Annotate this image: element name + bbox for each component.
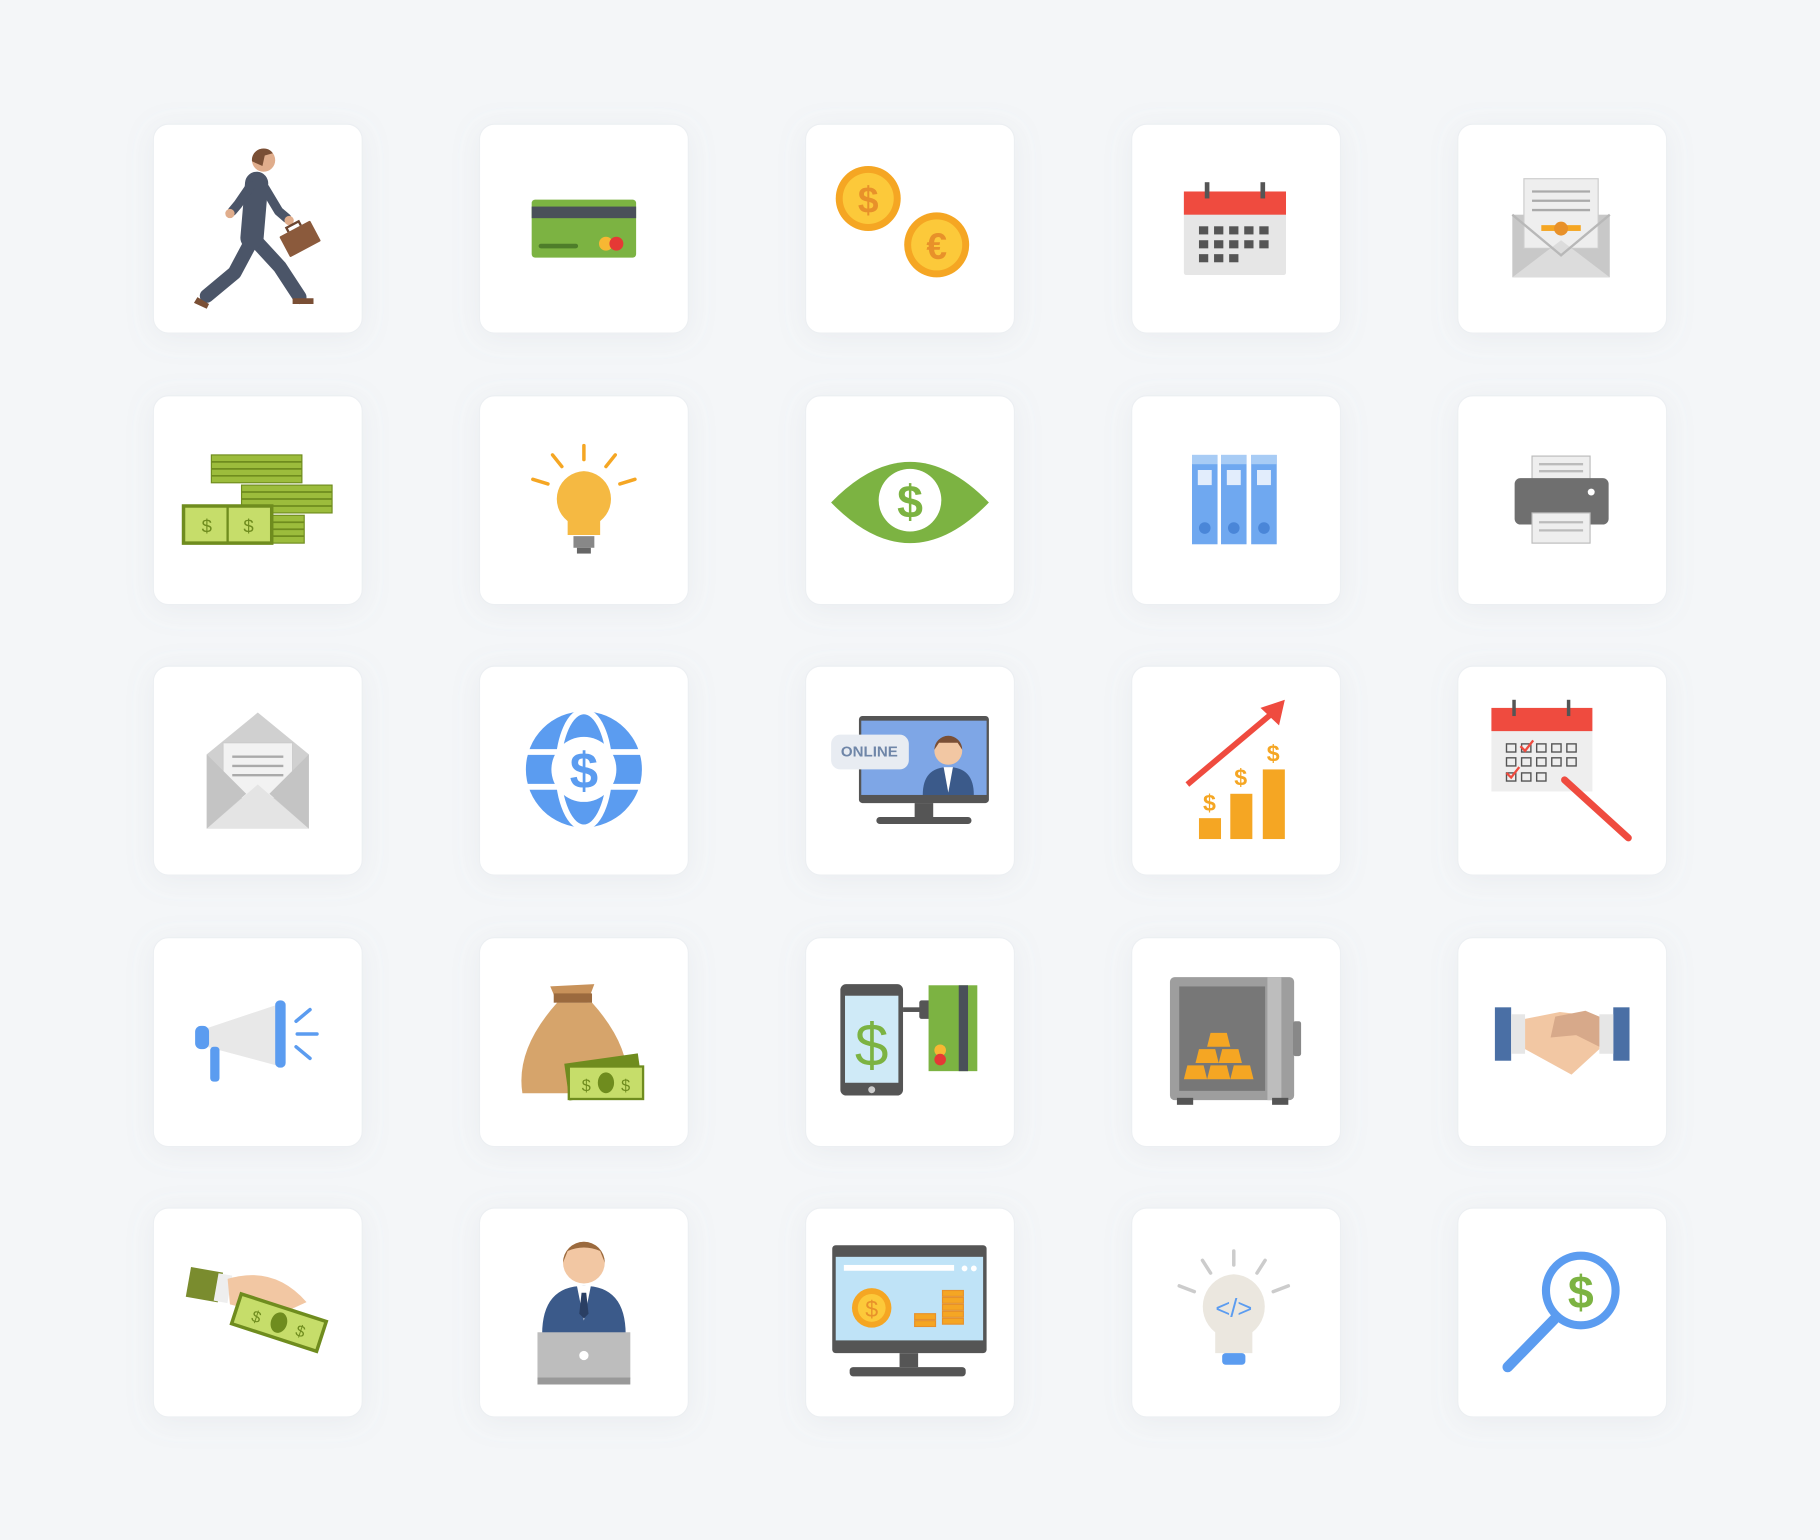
icon: phone payment — [840, 984, 977, 1096]
icon: growth chart — [1187, 700, 1285, 839]
icon: money bag: $ — [582, 1077, 591, 1095]
icon: online monitor: ONLINE — [841, 744, 898, 761]
icon: calendar — [1184, 182, 1286, 275]
icon: calendar magnifier — [1491, 700, 1628, 838]
icon: monitor with coins: $ — [865, 1296, 878, 1322]
icon: magnifier dollar — [1508, 1256, 1616, 1367]
icon: growth chart: $ — [1234, 765, 1247, 791]
icon: hand with money: $ — [249, 1307, 263, 1327]
icon: magnifier dollar: $ — [1568, 1266, 1594, 1318]
icon: light bulb — [533, 446, 635, 554]
icon: credit card — [532, 200, 636, 258]
icon: hand with money — [186, 1267, 328, 1353]
icon: globe dollar — [526, 711, 642, 827]
icon: eye with dollar: $ — [897, 476, 923, 528]
card grid — [153, 124, 1667, 1417]
icon: money stacks — [184, 455, 332, 543]
icon: money stacks: $ — [202, 516, 213, 537]
icon: growth chart: $ — [1203, 790, 1216, 816]
icon: code bulb: </> — [1215, 1295, 1252, 1323]
icon: money bag — [521, 984, 643, 1101]
icon: hand with money: $ — [293, 1322, 307, 1342]
icon: coins: $ — [858, 178, 879, 220]
icon: handshake — [1495, 1007, 1630, 1075]
icon: online monitor — [831, 716, 989, 824]
icon: coins — [836, 166, 969, 277]
icon: money bag: $ — [621, 1077, 630, 1095]
icon: envelope with letter — [1512, 179, 1610, 277]
icon: printer — [1515, 456, 1609, 543]
icon: growth chart: $ — [1267, 740, 1280, 766]
icon: megaphone — [195, 1000, 317, 1082]
icon: monitor with coins — [832, 1245, 987, 1376]
icon: phone payment: $ — [855, 1010, 888, 1078]
icon: safe with gold — [1170, 977, 1301, 1105]
icon: open envelope — [207, 713, 309, 829]
icon: eye with dollar — [831, 462, 989, 543]
icon: binders — [1192, 455, 1277, 544]
icon: money stacks: $ — [243, 516, 254, 537]
icon: walking businessman — [194, 148, 321, 309]
icon: man with laptop — [537, 1242, 630, 1384]
icon: code bulb — [1179, 1251, 1288, 1365]
icon: globe dollar: $ — [570, 742, 598, 799]
icon: coins: € — [926, 225, 947, 267]
